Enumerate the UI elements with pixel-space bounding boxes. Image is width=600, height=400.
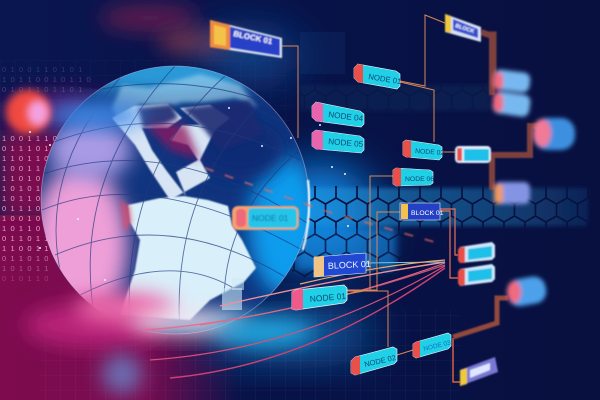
background grid bbox=[0, 60, 460, 400]
binary code panel: 0 1 1 0 1 1 bbox=[2, 234, 50, 243]
node: NODE 04: NODE 04 bbox=[328, 110, 364, 123]
light streak orb left bbox=[6, 90, 145, 134]
blurred nodes: upper right pair bbox=[492, 69, 531, 118]
sparkle dots bbox=[29, 107, 349, 281]
binary code panel: 1 1 0 1 0 1 1 bbox=[2, 174, 58, 183]
node: NODE 01 upper bbox=[354, 64, 402, 89]
binary code panel: 0 1 1 1 0 1 1 0 bbox=[2, 144, 66, 153]
binary code panel: 1 0 1 0 1 1 bbox=[2, 264, 50, 273]
node: NODE 02 middle: NODE 02 bbox=[415, 148, 445, 157]
blurred node: lower orb bbox=[505, 275, 548, 308]
node: BLOCK 01 lower: BLOCK 01 bbox=[328, 259, 371, 271]
landmass: dark interior bbox=[138, 100, 262, 150]
node: BLOCK 01 middle: BLOCK 01 bbox=[411, 210, 444, 217]
globe meridians and parallels bbox=[40, 66, 310, 335]
binary code panel: 1 0 1 1 0 0 bbox=[2, 224, 50, 233]
node: NODE 01 large on globe bbox=[232, 206, 299, 230]
globe ocean glow bbox=[41, 66, 309, 310]
binary code panel: 1 0 1 0 1 0 0 bbox=[2, 184, 58, 193]
node: top right block bbox=[445, 14, 481, 42]
binary code panel: 1 0 0 1 0 1 bbox=[2, 214, 50, 223]
node: NODE 01 large on globe: NODE 01 bbox=[252, 213, 289, 223]
landmass: South America bbox=[120, 196, 256, 320]
blurred thick connectors bbox=[453, 32, 540, 337]
binary code panel: 0 1 0 1 1 0 1 1 0 1 bbox=[2, 85, 83, 94]
binary code panel: 0 1 0 0 1 1 0 1 0 1 bbox=[2, 65, 83, 74]
hexagon band bbox=[292, 32, 592, 278]
node: NODE 05 bbox=[312, 130, 364, 153]
node: BLOCK 01 middle bbox=[400, 203, 444, 220]
binary code panel: 1 0 0 1 1 0 1 bbox=[2, 164, 58, 173]
node: BLOCK 01 lower bbox=[314, 253, 371, 277]
red dashed trail bbox=[205, 168, 445, 245]
node: NODE 01 lower bbox=[292, 285, 347, 310]
globe bbox=[40, 66, 310, 334]
binary code panel: 1 1 0 1 1 0 1 1 bbox=[2, 154, 66, 163]
globe rim highlight bbox=[303, 180, 309, 250]
blurred node: large orb bbox=[533, 118, 575, 150]
blurred nodes: right pair bbox=[458, 242, 495, 286]
node: top-left BLOCK 01: BLOCK 01 bbox=[233, 29, 274, 46]
pink and white lower blend bbox=[25, 278, 315, 394]
node: NODE 02 lower bbox=[351, 347, 397, 375]
node: NODE 05: NODE 05 bbox=[328, 137, 364, 149]
node: NODE 01 upper: NODE 01 bbox=[368, 72, 402, 86]
binary code panel bbox=[2, 65, 92, 283]
binary code panel: 0 1 1 0 1 0 bbox=[2, 254, 50, 263]
blurred node: bottom right block bbox=[460, 357, 498, 386]
node: NODE 03 lower bbox=[413, 333, 452, 358]
binary code panel: 1 1 0 0 1 1 bbox=[2, 244, 50, 253]
binary code panel: 1 0 1 1 0 1 bbox=[2, 194, 50, 203]
node: NODE 06 bbox=[393, 168, 434, 186]
binary code panel: 1 0 1 1 0 0 1 0 1 1 0 bbox=[2, 75, 92, 84]
node: NODE 06: NODE 06 bbox=[405, 176, 434, 183]
blurred node: cyan middle bbox=[455, 146, 491, 163]
binary code panel: 1 0 0 1 1 1 0 1 0 bbox=[2, 134, 75, 143]
node: NODE 02 middle bbox=[403, 140, 445, 160]
node: top-left BLOCK 01 bbox=[210, 20, 282, 58]
background colour glows bbox=[0, 4, 375, 400]
node: top right block: BLOCK bbox=[454, 23, 475, 35]
binary code panel: 0 1 1 1 0 1 bbox=[2, 204, 50, 213]
landmass: Arctic and North America bbox=[111, 72, 258, 116]
fan of connector lines bbox=[145, 260, 445, 378]
binary code panel: 0 1 0 1 1 0 bbox=[2, 274, 50, 283]
node: NODE 03 lower: NODE 03 bbox=[423, 339, 452, 353]
node: NODE 02 lower: NODE 02 bbox=[363, 353, 397, 369]
blurred node: lower middle bbox=[494, 182, 530, 204]
node: NODE 01 lower: NODE 01 bbox=[309, 291, 347, 304]
thin connectors bbox=[282, 15, 460, 382]
node: NODE 04 bbox=[312, 102, 364, 127]
